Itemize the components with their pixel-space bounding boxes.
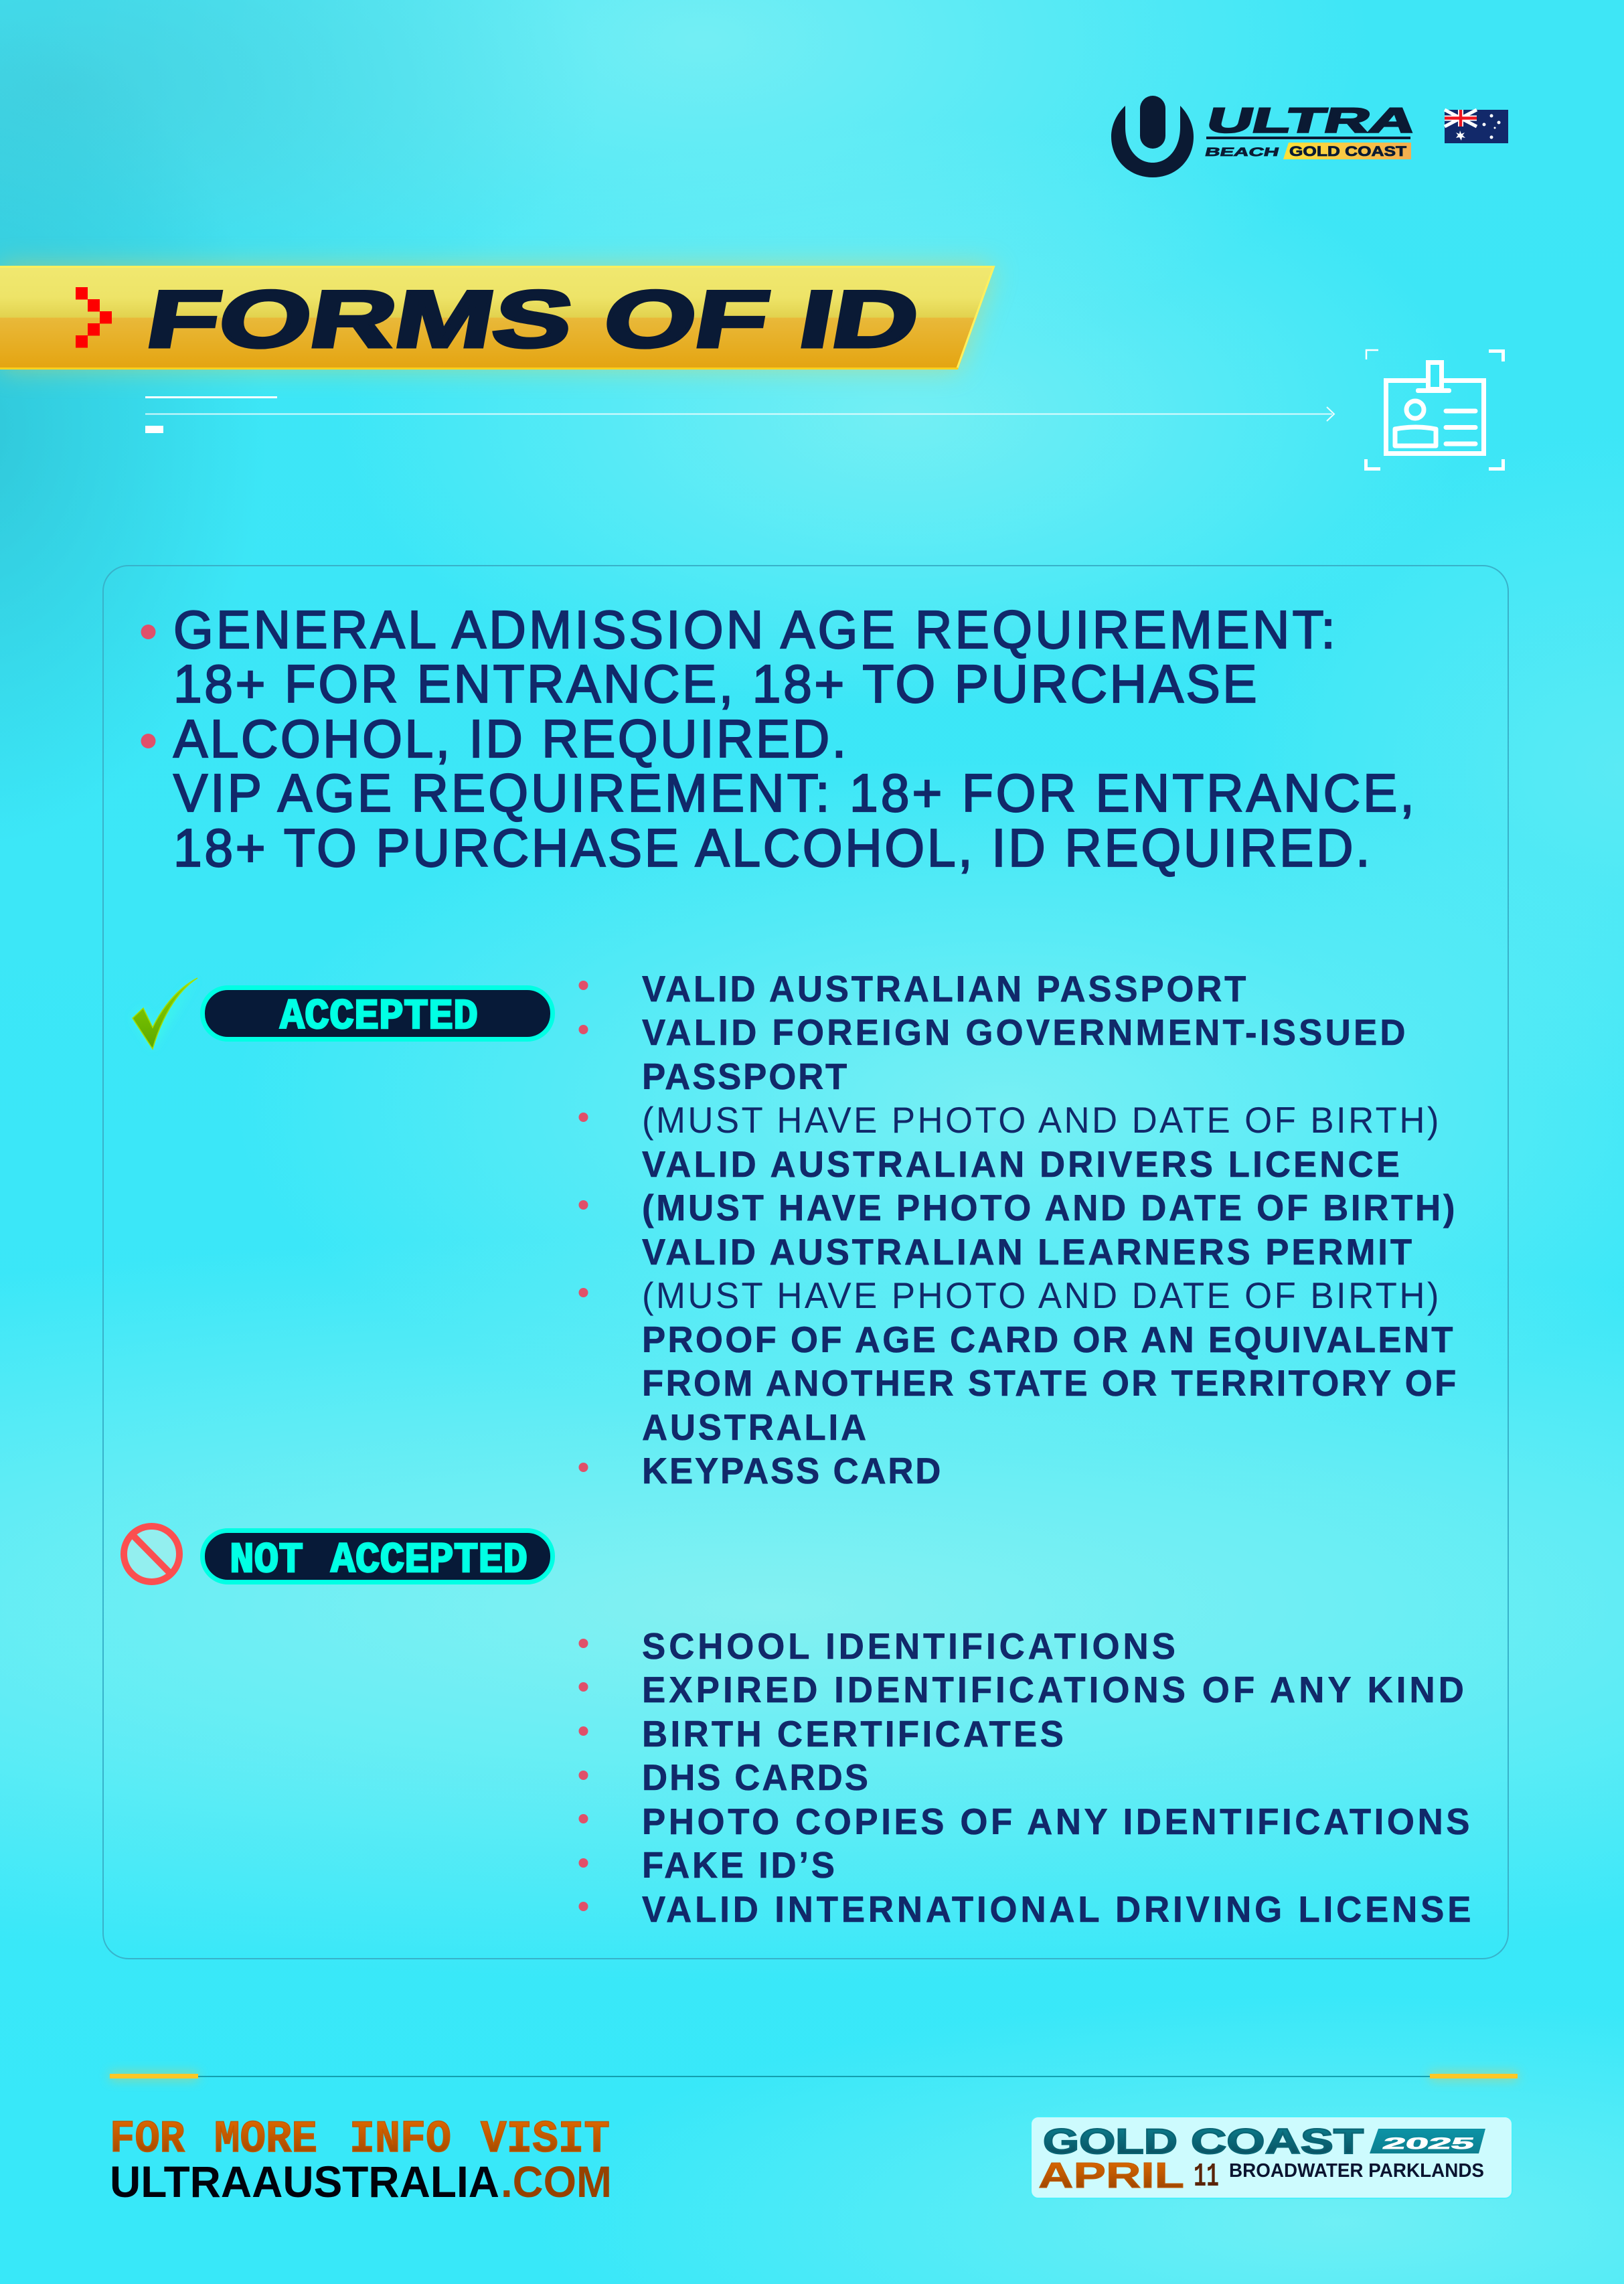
list: accepted IDs: AUSTRALIA [642,1407,866,1448]
list: accepted IDs: (MUST HAVE PHOTO AND DATE OF BIRTH) [642,1100,1439,1141]
icon: Ultra U mark [1111,96,1194,177]
list: not accepted IDs: VALID INTERNATIONAL DRIVING LICENSE [642,1889,1471,1930]
logo wordmark: ULTRA: ULTRA [1203,101,1420,140]
text: GOLD COAST: COAST [1191,2122,1364,2161]
icon: red pixel chevron [76,287,112,348]
text block: age requirements: GENERAL ADMISSION AGE REQUIREMENT: [173,600,1335,659]
list: accepted IDs: VALID FOREIGN GOVERNMENT-ISSUED [642,1012,1406,1053]
icon: ID badge card [1366,350,1504,469]
event date card [1031,2117,1512,2198]
text: venue: BROADWATER PARKLANDS [1229,2160,1484,2182]
badge: 2025: 2025 [1381,2135,1476,2153]
badge: NOT ACCEPTED [202,1530,553,1585]
icon: prohibited sign [124,1526,179,1582]
text: date 11: 11 [1194,2158,1219,2196]
bullets: age requirements [141,625,155,748]
icon: green check mark [133,978,197,1049]
list: accepted IDs: (MUST HAVE PHOTO AND DATE OF BIRTH) [642,1188,1455,1228]
text: APRIL: APRIL [1038,2155,1184,2196]
list: not accepted IDs: EXPIRED IDENTIFICATIONS OF ANY KIND [642,1669,1464,1710]
badge: NOT ACCEPTED: ACCEPTED [331,1537,527,1585]
text: GOLD COAST: GOLD [1043,2122,1178,2161]
badge: ACCEPTED [202,988,553,1042]
list: accepted IDs: PROOF OF AGE CARD OR AN EQUIVALENT [642,1319,1453,1360]
footer: more info text [110,2114,612,2206]
list: accepted IDs [642,969,1456,1491]
bullets: accepted IDs [578,981,588,1472]
text block: age requirements: 18+ FOR ENTRANCE, 18+ TO PURCHASE [173,654,1257,714]
title banner [0,266,995,370]
footer: more info text: VISIT [481,2114,610,2166]
footer: more info text: MORE [214,2114,317,2166]
footer: more info text: ULTRAAUSTRALIA [110,2157,499,2206]
list: accepted IDs: VALID AUSTRALIAN DRIVERS LICENCE [642,1144,1400,1185]
list: accepted IDs: VALID AUSTRALIAN LEARNERS PERMIT [642,1232,1412,1273]
list: not accepted IDs [642,1626,1471,1930]
list: accepted IDs: PASSPORT [642,1056,847,1097]
text block: age requirements: 18+ TO PURCHASE ALCOHOL, ID REQUIRED. [173,818,1370,878]
panel: age requirements and ID lists [103,566,1508,1959]
text block: age requirements: VIP AGE REQUIREMENT: 18+ FOR ENTRANCE, [173,763,1414,823]
footer rule with gold end caps [110,2072,1518,2080]
logo wordmark: BEACH: BEACH [1204,145,1281,159]
list: accepted IDs: KEYPASS CARD [642,1451,941,1491]
list: not accepted IDs: BIRTH CERTIFICATES [642,1714,1064,1755]
badge: NOT ACCEPTED: NOT [230,1537,303,1585]
bullets: not accepted IDs [578,1639,588,1911]
list: accepted IDs: FROM ANOTHER STATE OR TERRITORY OF [642,1363,1456,1404]
list: not accepted IDs: DHS CARDS [642,1757,868,1798]
logo badge: GOLD COAST [1283,143,1411,159]
badge: 2025 [1370,2129,1485,2153]
footer: more info text: FOR [110,2114,185,2166]
text block: age requirements [173,600,1414,878]
list: not accepted IDs: PHOTO COPIES OF ANY IDENTIFICATIONS [642,1801,1470,1842]
footer: more info text: INFO [349,2114,451,2166]
list: not accepted IDs: FAKE ID’S [642,1845,835,1886]
text block: age requirements: ALCOHOL, ID REQUIRED. [173,709,846,768]
icon: Australian flag [1445,110,1508,143]
heading: FORMS OF ID: FORMS OF ID [140,274,926,364]
arrow: decorative timeline with arrowhead [145,396,1334,433]
logo badge: GOLD COAST: GOLD COAST [1289,144,1406,159]
list: accepted IDs: VALID AUSTRALIAN PASSPORT [642,969,1246,1009]
logo: Ultra Beach Gold Coast [1111,96,1420,177]
list: accepted IDs: (MUST HAVE PHOTO AND DATE OF BIRTH) [642,1275,1439,1316]
text: GOLD COAST [1043,2122,1364,2161]
list: not accepted IDs: SCHOOL IDENTIFICATIONS [642,1626,1175,1667]
footer: more info text: .COM [501,2157,612,2206]
badge: ACCEPTED: ACCEPTED [280,993,478,1042]
